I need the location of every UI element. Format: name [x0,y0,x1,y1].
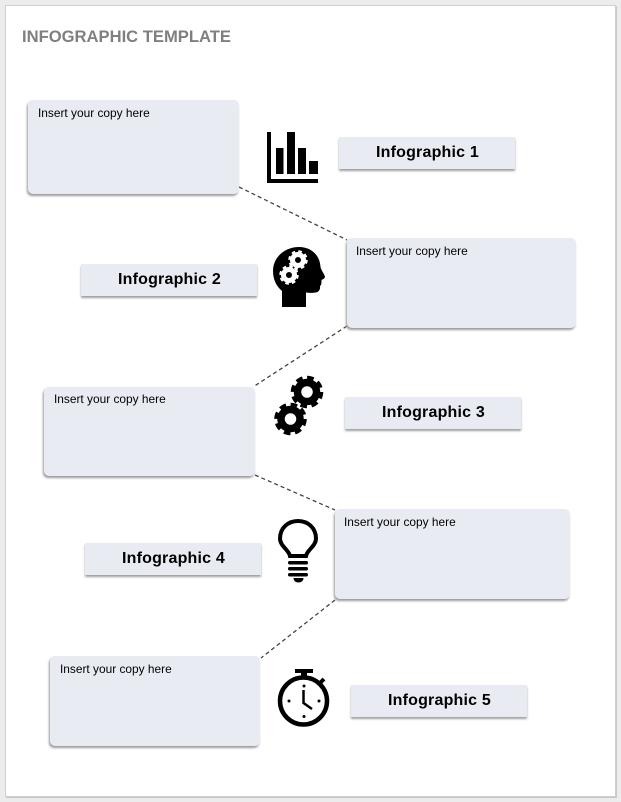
label: Infographic 5: Infographic 5 [388,692,491,709]
connector 2 to 3 [253,326,347,387]
icon: light bulb [280,521,316,582]
panel: copy box 1 [28,100,239,194]
panel: copy box 1: Insert your copy here [38,106,150,120]
connector 1 to 2 [239,187,347,240]
panel: copy box 3 [44,387,255,476]
label: Infographic 1: Infographic 1 [376,144,479,161]
icon: bar chart [267,132,318,183]
icon: head with gears [273,247,325,307]
label: Infographic 3: Infographic 3 [382,404,485,421]
panel: copy box 2 [347,238,576,328]
icon: two gears [276,378,321,433]
panel: copy box 4: Insert your copy here [344,515,456,529]
label: Infographic 5 [351,685,527,717]
panel: copy box 2: Insert your copy here [356,244,468,258]
panel: copy box 3: Insert your copy here [54,392,166,406]
panel: copy box 5: Insert your copy here [60,662,172,676]
label: Infographic 4: Infographic 4 [122,550,225,567]
title: INFOGRAPHIC TEMPLATE [22,27,231,46]
label: Infographic 2: Infographic 2 [118,271,221,288]
connector 4 to 5 [261,600,335,658]
label: Infographic 1 [339,137,515,169]
panel: copy box 5 [50,656,260,746]
panel: copy box 4 [335,509,570,599]
label: Infographic 2 [81,264,257,296]
icon: stopwatch [280,669,327,724]
label: Infographic 3 [345,397,521,429]
label: Infographic 4 [85,543,261,575]
connector 3 to 4 [255,475,335,510]
